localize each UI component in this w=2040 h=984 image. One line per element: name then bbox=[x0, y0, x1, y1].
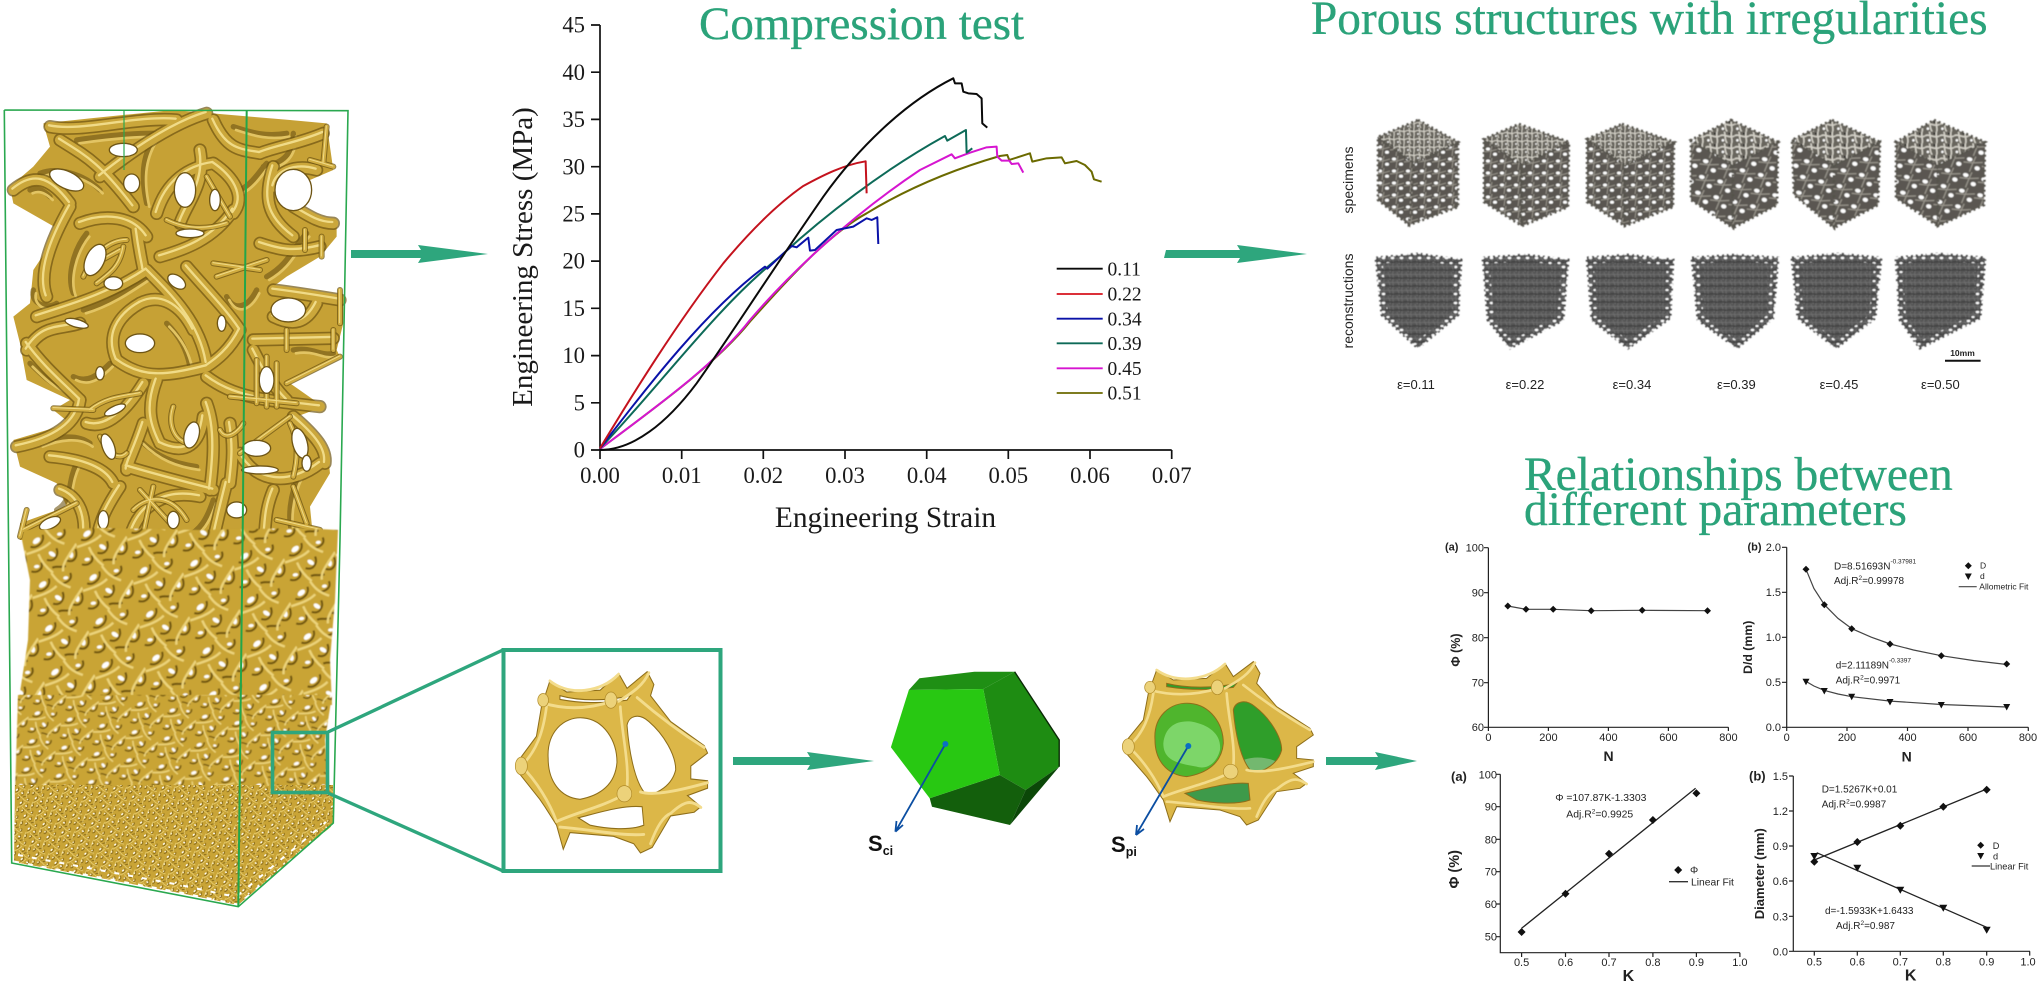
equations: =0.9987 bbox=[1850, 799, 1887, 810]
equations: D=1.5267K+0.01 bbox=[1822, 784, 1898, 795]
reconstruction 0.39 bbox=[1692, 255, 1778, 348]
equations: D=8.51693N bbox=[1834, 561, 1890, 572]
epsilon labels: ε=0.39 bbox=[1717, 377, 1756, 392]
foam: small cells bbox=[15, 695, 332, 795]
row label: reconstructions: reconstructions bbox=[1340, 254, 1356, 348]
x tick labels: 0.01 bbox=[662, 463, 702, 488]
axis titles: D/d (mm) bbox=[1741, 621, 1755, 674]
specimen 0.45 bbox=[1792, 120, 1880, 228]
specimen 0.22 bbox=[1484, 124, 1569, 226]
axis titles: Φ (%) bbox=[1447, 850, 1463, 889]
epsilon labels bbox=[1397, 377, 1960, 392]
tick labels bbox=[1479, 769, 1497, 944]
x axis title: Engineering Strain bbox=[775, 502, 996, 534]
data points bbox=[1802, 566, 2010, 668]
data points bbox=[1518, 789, 1700, 936]
epsilon labels: ε=0.34 bbox=[1613, 377, 1651, 392]
chart: porosity vs K: 0.8 bbox=[1645, 957, 1661, 969]
tick labels: 50 bbox=[1485, 932, 1497, 944]
scale bar: 10mm bbox=[1950, 348, 1975, 358]
chart: porosity vs K: 1.0 bbox=[1732, 957, 1748, 969]
label Spi: pi bbox=[1126, 845, 1137, 859]
legend bbox=[1057, 260, 1142, 405]
zoom connector lines bbox=[328, 650, 503, 871]
chart: porosity vs K: 0.6 bbox=[1558, 957, 1573, 969]
reconstruction 0.11 bbox=[1376, 254, 1461, 348]
equations: d=2.11189N bbox=[1836, 661, 1889, 672]
axes bbox=[1782, 547, 2028, 731]
chart: D/d vs N: 600 bbox=[1959, 732, 1977, 744]
equations bbox=[1555, 793, 1647, 821]
tick labels: 0.0 bbox=[1773, 946, 1788, 958]
tick labels: 90 bbox=[1485, 802, 1497, 814]
arrow: unit cell to polyhedron bbox=[733, 752, 874, 770]
chart: diameter vs K: 1.0 bbox=[2020, 957, 2036, 969]
chart: diameter vs K bbox=[1749, 769, 2036, 984]
fit lines bbox=[1814, 789, 1987, 927]
legend: 0.45 bbox=[1108, 359, 1142, 380]
legend bbox=[1959, 561, 2029, 592]
specimen 0.50 bbox=[1896, 120, 1985, 226]
tick labels: 80 bbox=[1485, 834, 1497, 846]
axes bbox=[591, 25, 1172, 459]
inscribed green faces bbox=[1153, 682, 1283, 805]
label Spi: S bbox=[1111, 832, 1126, 857]
axes bbox=[1496, 774, 1740, 957]
chart: porosity vs N: N bbox=[1603, 748, 1614, 764]
legend: 0.51 bbox=[1108, 384, 1142, 405]
data curves bbox=[600, 78, 1102, 450]
fit curves bbox=[1806, 569, 2007, 707]
y tick labels bbox=[562, 13, 585, 463]
foam: lower edge breakup bbox=[14, 822, 333, 905]
curve 0.22 bbox=[600, 161, 867, 448]
equations: -0.3397 bbox=[1889, 658, 1911, 665]
chart: porosity vs N bbox=[1445, 542, 1738, 764]
tick labels: 70 bbox=[1485, 867, 1497, 879]
legend: 0.34 bbox=[1108, 309, 1142, 330]
tick labels: 1.5 bbox=[1773, 771, 1788, 783]
x tick labels bbox=[580, 463, 1192, 488]
equations: Adj.R bbox=[1836, 921, 1860, 932]
chart: porosity vs K: (a) bbox=[1451, 769, 1467, 784]
equations: d=-1.5933K+1.6433 bbox=[1825, 906, 1914, 917]
label Sci: S bbox=[868, 831, 883, 856]
curve 0.45 bbox=[600, 147, 1023, 449]
curve 0.34 bbox=[600, 217, 878, 448]
data points bbox=[1810, 786, 1991, 866]
tick labels: 1.5 bbox=[1766, 587, 1781, 599]
axes bbox=[1789, 776, 2030, 956]
tick labels: 80 bbox=[1472, 632, 1484, 644]
y tick labels: 45 bbox=[562, 13, 585, 38]
tick labels bbox=[1773, 771, 1788, 958]
foam: finest cells bbox=[14, 785, 333, 905]
tick labels: 90 bbox=[1472, 588, 1484, 600]
equations bbox=[1822, 784, 1914, 932]
equations: 2 bbox=[1860, 920, 1864, 927]
title: relationships between different parameters bbox=[1524, 449, 1953, 536]
equations: Φ =107.87K-1.3303 bbox=[1555, 793, 1647, 804]
chart: porosity vs K: 0.7 bbox=[1601, 957, 1617, 969]
inset selector square bbox=[272, 732, 328, 792]
tick labels: 1.2 bbox=[1773, 806, 1788, 818]
tick labels: 100 bbox=[1479, 769, 1497, 781]
x tick labels: 0.04 bbox=[907, 463, 947, 488]
chart: D/d vs N: 200 bbox=[1838, 732, 1856, 744]
legend: D bbox=[1993, 841, 2000, 851]
specimen 0.34 bbox=[1587, 124, 1674, 226]
y tick labels: 40 bbox=[562, 60, 585, 85]
chart: porosity vs K bbox=[1447, 769, 1748, 984]
y tick labels: 25 bbox=[562, 202, 585, 226]
tick labels: 0.5 bbox=[1766, 677, 1781, 689]
icon: polyhedron with Sci vector bbox=[868, 672, 1059, 858]
equations: Adj.R bbox=[1822, 799, 1846, 810]
chart: D/d vs N: 400 bbox=[1898, 732, 1917, 744]
icon: unit cell with Spi faces bbox=[1111, 662, 1313, 859]
title: relationships between different parameters: different parameters bbox=[1524, 484, 1907, 536]
chart: D/d vs N: N bbox=[1902, 748, 1912, 764]
equations: =0.99978 bbox=[1862, 576, 1905, 587]
tick labels: 0.0 bbox=[1766, 722, 1781, 734]
epsilon labels: ε=0.22 bbox=[1506, 377, 1544, 392]
legend: 0.39 bbox=[1108, 334, 1142, 355]
axis titles: Diameter (mm) bbox=[1752, 828, 1767, 919]
equations: Adj.R bbox=[1836, 675, 1860, 686]
legend: d bbox=[1980, 571, 1985, 581]
row label: specimens: specimens bbox=[1340, 147, 1356, 213]
legend bbox=[1972, 841, 2029, 872]
legend: Linear Fit bbox=[1691, 878, 1734, 888]
curve 0.11 bbox=[600, 78, 987, 450]
tick labels: 70 bbox=[1472, 678, 1484, 690]
reconstruction 0.45 bbox=[1792, 254, 1881, 348]
label Sci: ci bbox=[883, 844, 893, 858]
panel: specimens and reconstructions bbox=[1340, 120, 1985, 392]
foam: medium cells bbox=[18, 528, 338, 705]
chart: porosity vs N: 200 bbox=[1539, 732, 1558, 744]
specimen 0.11 bbox=[1378, 120, 1458, 225]
x tick labels: 0.07 bbox=[1152, 463, 1192, 488]
tick labels: 100 bbox=[1466, 542, 1484, 554]
foam pores bbox=[37, 143, 312, 533]
equations: -0.37981 bbox=[1890, 558, 1916, 565]
gold struts bbox=[1122, 662, 1313, 825]
panel: 3D porous foam tower bbox=[4, 110, 348, 907]
polyhedron bbox=[891, 672, 1059, 825]
epsilon labels: ε=0.45 bbox=[1820, 377, 1858, 392]
axis titles: Φ (%) bbox=[1449, 633, 1463, 667]
chart: diameter vs K: 0.6 bbox=[1850, 957, 1865, 969]
equations: 2 bbox=[1846, 798, 1850, 805]
y axis title: Engineering Stress (MPa) bbox=[507, 107, 539, 407]
frame bbox=[504, 650, 720, 871]
chart: porosity vs N: 800 bbox=[1719, 732, 1738, 744]
y tick labels: 10 bbox=[562, 343, 585, 368]
equations: =0.9925 bbox=[1595, 810, 1633, 821]
axes bbox=[1484, 548, 1728, 731]
tick labels: 1.0 bbox=[1766, 632, 1781, 644]
arrow: tower to chart bbox=[351, 245, 488, 263]
legend: Allometric Fit bbox=[1979, 582, 2029, 592]
tick labels: 60 bbox=[1472, 722, 1484, 734]
chart: D/d vs N bbox=[1741, 542, 2037, 764]
y tick labels: 35 bbox=[562, 107, 585, 132]
legend: D bbox=[1980, 561, 1986, 571]
curve 0.39 bbox=[600, 130, 972, 448]
epsilon labels: ε=0.11 bbox=[1397, 377, 1435, 392]
equations: =0.987 bbox=[1864, 921, 1895, 932]
chart: D/d vs N: 800 bbox=[2019, 732, 2037, 744]
x tick labels: 0.03 bbox=[825, 463, 865, 488]
legend: 0.11 bbox=[1108, 260, 1141, 281]
chart: diameter vs K: 0.7 bbox=[1893, 957, 1908, 969]
chart: porosity vs N: (a) bbox=[1445, 542, 1459, 554]
chart: porosity vs K: 0.9 bbox=[1689, 957, 1704, 969]
arrow: chart to structures bbox=[1164, 245, 1307, 263]
wireframe bounding box bbox=[4, 110, 348, 907]
tick labels: 0.6 bbox=[1773, 876, 1788, 888]
equations: 2 bbox=[1592, 809, 1596, 816]
unit cell struts bbox=[515, 672, 708, 853]
chart: porosity vs N: 0 bbox=[1485, 732, 1491, 744]
tick labels: 60 bbox=[1485, 899, 1497, 911]
equations: Adj.R bbox=[1566, 810, 1592, 821]
equations: =0.9971 bbox=[1864, 675, 1901, 686]
equations: Adj.R bbox=[1834, 576, 1858, 587]
equations: 2 bbox=[1860, 674, 1864, 681]
legend: 0.22 bbox=[1108, 285, 1142, 306]
chart: D/d vs N: 0 bbox=[1784, 732, 1790, 744]
reconstruction 0.34 bbox=[1587, 255, 1673, 348]
arrow: unit cell to parameter charts bbox=[1326, 752, 1417, 770]
x tick labels: 0.05 bbox=[988, 463, 1028, 488]
chart: diameter vs K: 0.8 bbox=[1936, 957, 1951, 969]
y tick labels: 20 bbox=[562, 249, 585, 274]
chart: porosity vs K: 0.5 bbox=[1514, 957, 1529, 969]
tick labels: 0.9 bbox=[1773, 841, 1788, 853]
x tick labels: 0.06 bbox=[1070, 463, 1110, 488]
chart: porosity vs N: 400 bbox=[1599, 732, 1618, 744]
Sci vector bbox=[895, 741, 948, 832]
title: relationships between different parameters: Relationships between bbox=[1524, 449, 1953, 501]
y tick labels: 0 bbox=[574, 438, 585, 463]
specimen 0.39 bbox=[1691, 120, 1778, 228]
chart: diameter vs K: K bbox=[1905, 968, 1917, 984]
y tick labels: 15 bbox=[562, 296, 585, 321]
legend: Linear Fit bbox=[1990, 862, 2029, 872]
tick labels bbox=[1466, 542, 1484, 734]
curve 0.51 bbox=[600, 153, 1102, 449]
scale bar bbox=[1945, 348, 1981, 361]
chart: porosity vs N: 600 bbox=[1659, 732, 1678, 744]
legend: Φ bbox=[1690, 866, 1698, 876]
panel: zoomed unit cell bbox=[504, 650, 720, 871]
tick labels: 2.0 bbox=[1766, 542, 1781, 554]
tick labels: 0.3 bbox=[1773, 911, 1788, 923]
data bbox=[1508, 606, 1708, 611]
equations bbox=[1834, 558, 1916, 686]
y tick labels: 30 bbox=[562, 154, 585, 179]
legend bbox=[1669, 866, 1734, 888]
chart: diameter vs K: (b) bbox=[1749, 769, 1766, 784]
legend: d bbox=[1993, 852, 1998, 862]
equations: 2 bbox=[1858, 575, 1862, 582]
y tick labels: 5 bbox=[574, 390, 585, 415]
tick labels bbox=[1766, 542, 1781, 734]
x tick labels: 0.02 bbox=[743, 463, 783, 488]
foam: upper coarse struts bbox=[10, 110, 343, 540]
epsilon labels: ε=0.50 bbox=[1921, 377, 1960, 392]
x tick labels: 0.00 bbox=[580, 463, 620, 488]
reconstruction 0.22 bbox=[1483, 255, 1568, 348]
fit line bbox=[1522, 788, 1696, 928]
chart: engineering stress-strain curves bbox=[507, 13, 1192, 534]
Spi vector bbox=[1136, 743, 1191, 835]
reconstruction 0.50 bbox=[1896, 254, 1985, 348]
chart: diameter vs K: 0.9 bbox=[1979, 957, 1994, 969]
chart: D/d vs N: (b) bbox=[1748, 542, 1762, 554]
chart: diameter vs K: 0.5 bbox=[1807, 957, 1822, 969]
